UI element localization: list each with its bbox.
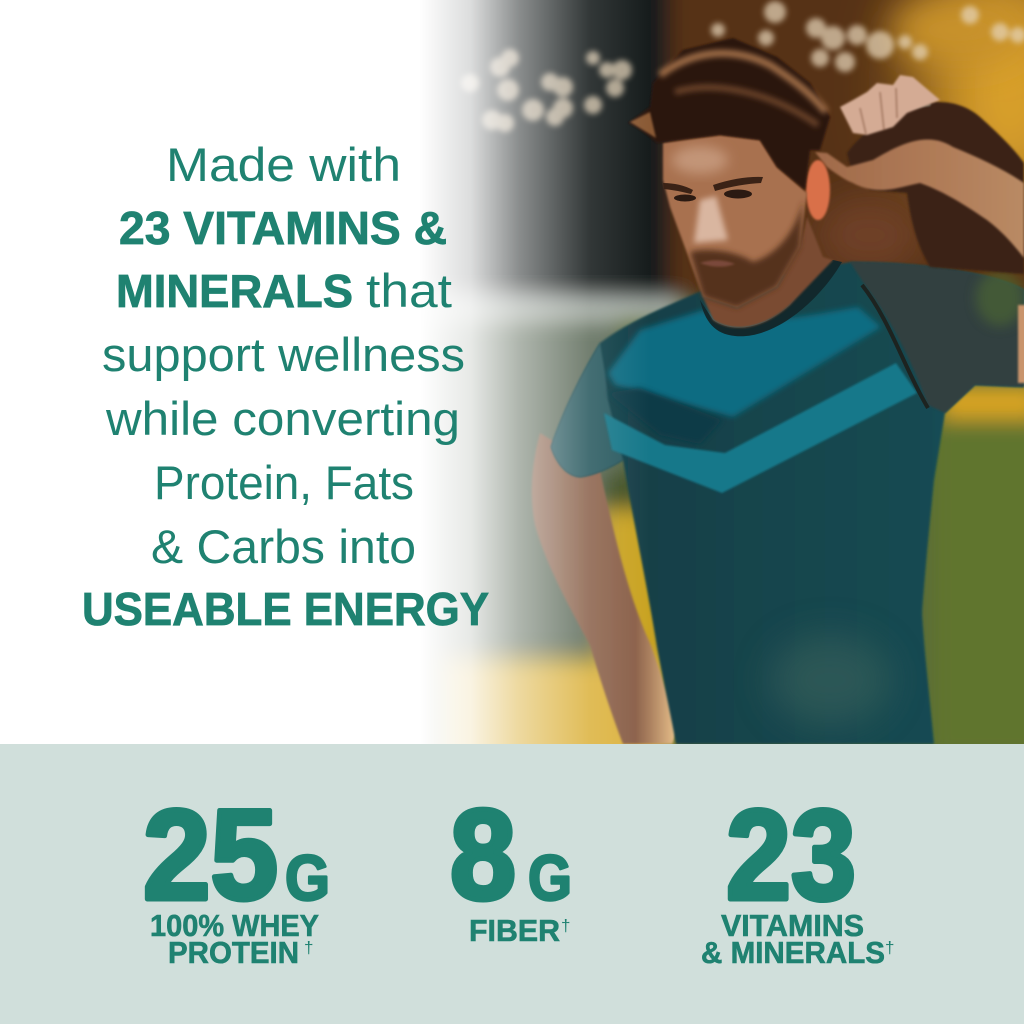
headline text block: that: [366, 264, 452, 317]
stat: 25g whey protein: †: [304, 938, 313, 957]
mouth: [700, 260, 735, 267]
hair: [628, 38, 830, 190]
stat: 23 vitamins and minerals: VITAMINS: [721, 908, 864, 943]
beard: [690, 200, 803, 308]
headline text block: [82, 138, 489, 635]
nose highlight: [694, 196, 728, 243]
stat: 8g fiber: 8: [450, 784, 516, 927]
headline text block: & Carbs into: [151, 520, 416, 573]
panel: nutrition stats: [0, 744, 1024, 1024]
headline text block: 23 VITAMINS &: [119, 202, 447, 254]
forehead highlight: [672, 146, 728, 174]
kettlebell: [847, 102, 1024, 274]
stat: 8g fiber: [450, 784, 572, 948]
stat: 8g fiber: G: [528, 842, 572, 914]
stat: 25g whey protein: G: [285, 842, 330, 914]
headline text block: Protein, Fats: [154, 456, 414, 509]
stat: 25g whey protein: 100% WHEY: [150, 908, 319, 943]
raised forearm and hand: [815, 75, 1024, 258]
neck: [703, 217, 833, 328]
face: [663, 135, 807, 308]
stat: 23 vitamins and minerals: [701, 784, 894, 970]
stat: 23 vitamins and minerals: 23: [726, 784, 856, 927]
photo: man lifting kettlebell at sunset: [432, 0, 1024, 744]
headline text block: support wellness: [102, 328, 465, 381]
headline text block: USEABLE ENERGY: [82, 583, 489, 635]
stat: 25g whey protein: 25: [143, 784, 278, 927]
headline text block: while converting: [105, 392, 460, 445]
ear: [806, 160, 830, 220]
stat: 8g fiber: †: [561, 916, 570, 935]
headline text block: MINERALS: [116, 265, 353, 317]
stat: 23 vitamins and minerals: †: [885, 938, 894, 957]
eyes and brows: [663, 177, 763, 202]
stat: 25g whey protein: [143, 784, 330, 970]
photo fade to white: [420, 0, 650, 744]
left arm: [532, 433, 680, 744]
stat: 23 vitamins and minerals: & MINERALS: [701, 935, 885, 970]
headline text block: Made with: [166, 138, 401, 191]
stat: 25g whey protein: PROTEIN: [168, 935, 299, 970]
stat: 8g fiber: FIBER: [469, 913, 560, 948]
photo background: [432, 0, 1024, 744]
t-shirt: [551, 260, 1024, 744]
bokeh lights: [461, 1, 1024, 132]
